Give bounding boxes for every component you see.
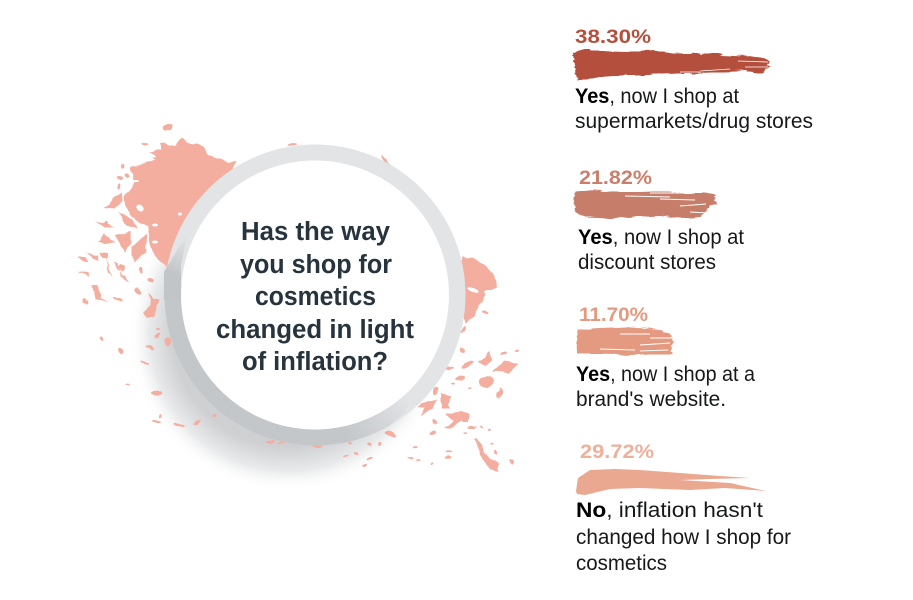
infographic canvas	[78, 30, 812, 570]
splatter holes	[133, 151, 492, 294]
question heading: Has the way	[241, 218, 391, 246]
badge outer ring	[164, 144, 466, 446]
result 2: discount stores: discount stores	[578, 251, 716, 274]
result 3: brand website: brand's website.	[576, 388, 726, 411]
lipstick bar 29.72	[576, 469, 766, 495]
result 4: no change: cosmetics	[576, 552, 667, 575]
label 38.30: Yes, now I shop at	[575, 85, 739, 108]
lipstick bar 11.70	[577, 327, 673, 355]
label 21.82: Yes, now I shop at	[578, 226, 744, 249]
question badge	[164, 144, 466, 446]
result 2: discount stores	[574, 168, 744, 274]
label 11.70: Yes, now I shop at a	[576, 363, 755, 386]
question heading: you shop for	[240, 251, 392, 279]
ring dark lower-left section	[164, 283, 340, 446]
lipstick bar 38.30	[573, 49, 771, 81]
result 4: no change	[576, 442, 791, 575]
question heading: of inflation?	[242, 348, 388, 376]
question heading	[216, 218, 415, 376]
ring fold bottom right	[342, 407, 398, 434]
circle drop shadow	[128, 172, 448, 492]
paint splatter behind the circle	[77, 122, 519, 471]
ring fold left	[164, 232, 188, 300]
label 29.72: No, inflation hasn't	[576, 499, 763, 522]
percentage 38.30: 38.30%	[575, 27, 651, 48]
result 1: supermarkets/drug stores: supermarkets/drug stores	[575, 110, 813, 133]
percentage 11.70: 11.70%	[579, 305, 648, 326]
lipstick bar 21.82	[574, 190, 718, 218]
result 4: no change: changed how I shop for	[576, 526, 791, 549]
result 3: brand website	[576, 305, 755, 411]
question heading: cosmetics	[255, 283, 376, 311]
result 1: supermarkets/drug stores	[573, 27, 813, 133]
badge white face	[181, 160, 449, 430]
percentage 29.72: 29.72%	[580, 442, 654, 463]
percentage 21.82: 21.82%	[579, 168, 652, 189]
question heading: changed in light	[216, 316, 415, 344]
